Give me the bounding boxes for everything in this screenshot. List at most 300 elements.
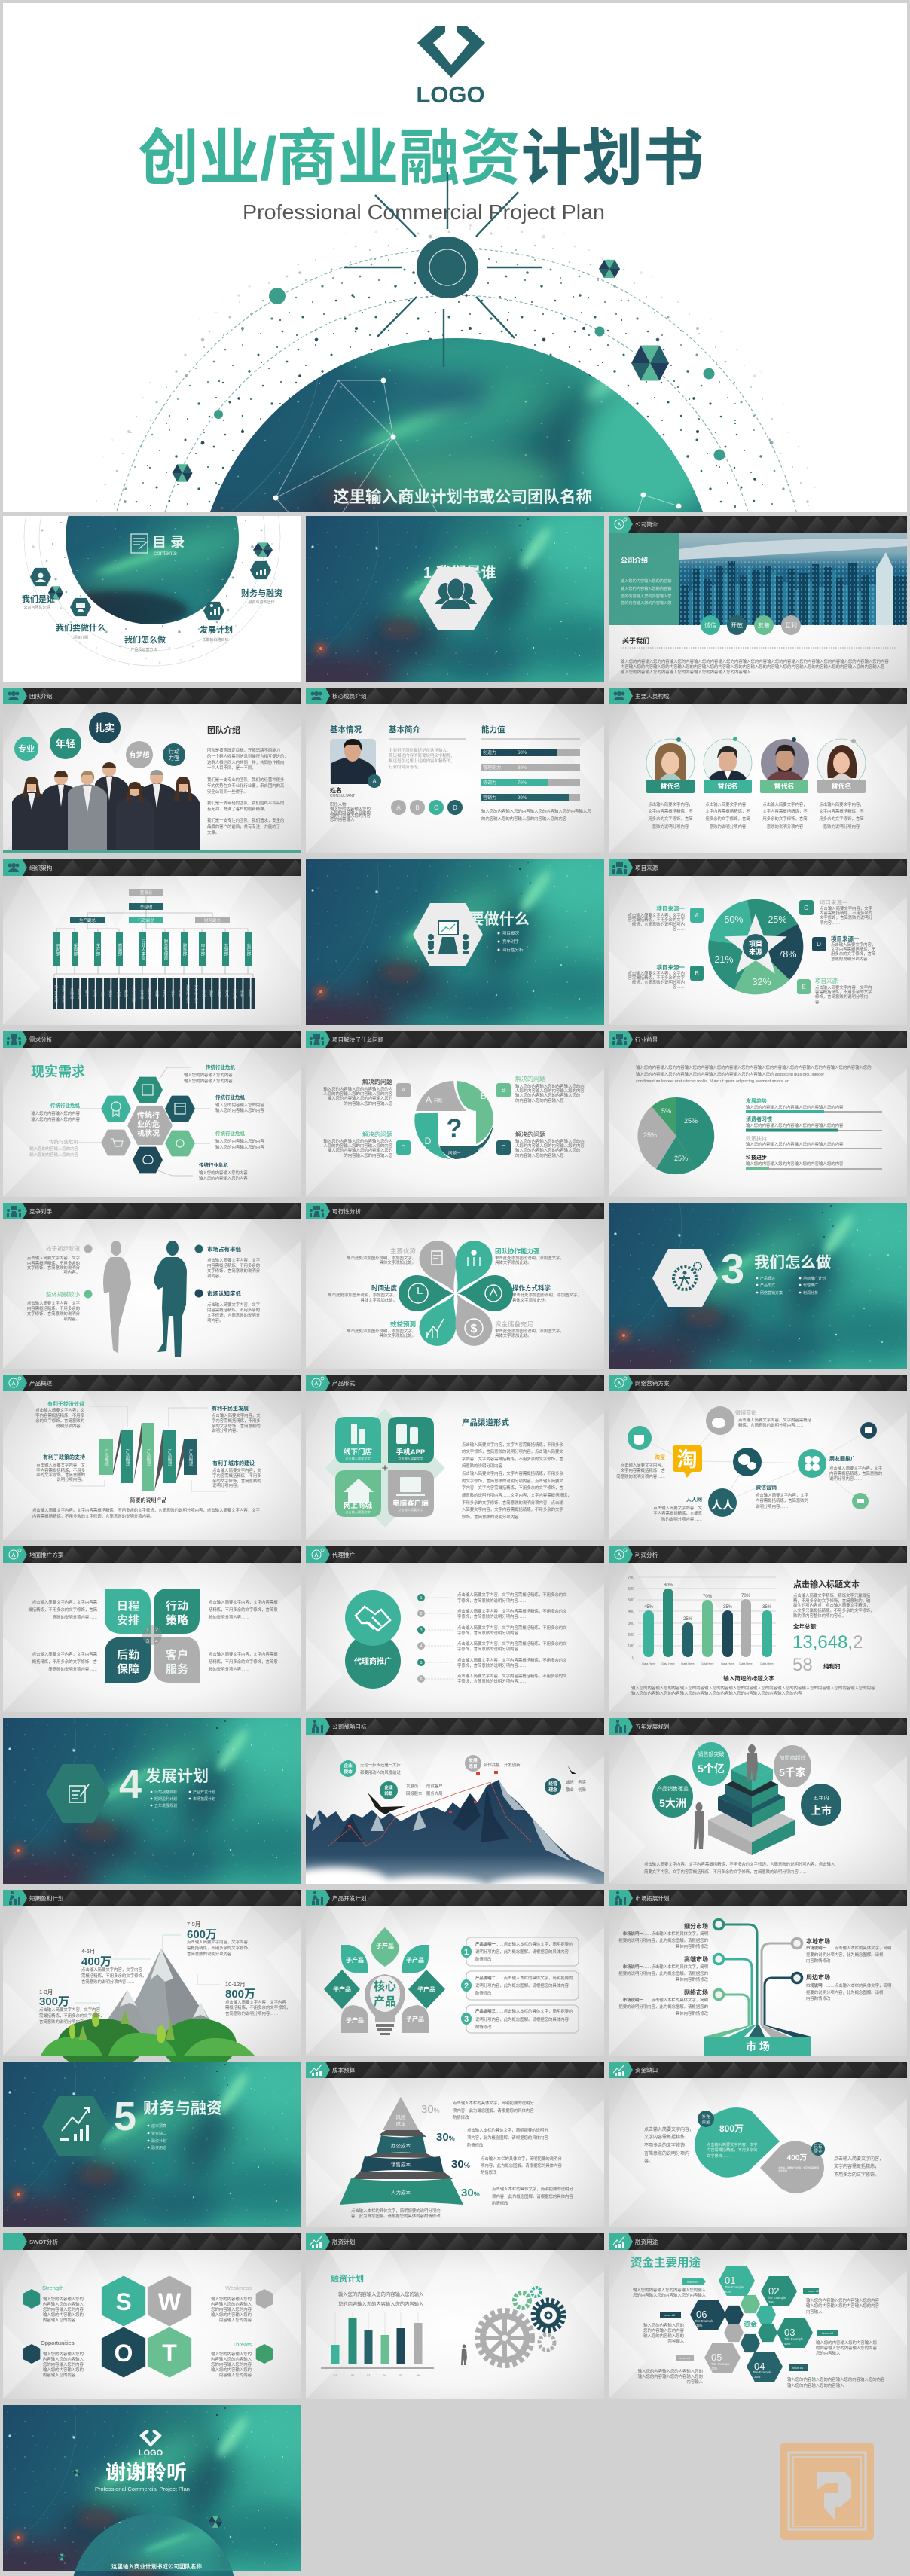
need notes right: 输入您的内容输入您的内容 — [199, 1175, 248, 1181]
orbit rings — [116, 249, 797, 512]
issue tags: Issue #1 — [687, 2280, 699, 2284]
channel text: 的文字修饰，言简意赅的说明分项内容，点击输入简要文 — [462, 1448, 563, 1454]
four quadrant tiles: 安排 — [117, 1613, 139, 1627]
cost pyramid — [340, 2097, 463, 2205]
gap notes: 不用多余的文字修饰， — [644, 2142, 689, 2148]
skill bars: 80% — [518, 766, 527, 771]
woman silhouette — [103, 1241, 131, 1354]
problem notes left: 输入您的内容输入您的内容输入您的内 — [323, 1138, 392, 1144]
issue tags: Issue #4 — [792, 2366, 804, 2370]
speech bubbles: 上市 — [811, 1805, 832, 1817]
fund notes: 内容输入 — [806, 2309, 823, 2315]
issue tags: Issue #3 — [822, 2331, 834, 2335]
hex icon marks — [35, 569, 266, 615]
market notes left: 市场说明一……点击输入本栏的具体文字，简明 — [623, 1930, 708, 1937]
subtitle: Professional Commercial Project Plan — [243, 200, 605, 224]
header icon — [8, 691, 19, 700]
department labels: 售后部 — [246, 943, 251, 957]
agent list: 4 — [420, 1644, 423, 1649]
agent list: 点击输入简要文字内容，文字内容需概括精炼，不用多余的文 — [457, 1592, 567, 1598]
member name: 您的内容输入您的内容 — [330, 813, 371, 819]
speech bubbles: 5个亿 — [698, 1763, 725, 1775]
letter tags: C — [502, 1144, 506, 1151]
section title: 发展计划 — [145, 1768, 209, 1785]
plan text — [338, 2291, 424, 2307]
bar chart: 35% — [762, 1605, 772, 1610]
marketing notes: 微信营销 — [756, 1484, 777, 1491]
channel text: 修饰，言简意赅的说明分项内容…… — [462, 1514, 527, 1520]
header title: 资金缺口 — [635, 2066, 658, 2074]
SWOT notes left: 内容输入您的内容输入 — [43, 2356, 84, 2362]
staff text: 用多余的文字修饰，言简 — [762, 816, 808, 822]
department labels: 采购部 — [72, 943, 78, 957]
summary text — [32, 1497, 260, 1519]
hexagon badge — [413, 903, 483, 966]
marketing notes: 文字内容需概括精炼，言 — [621, 1467, 666, 1473]
market notes left: 细分市场 — [684, 1922, 708, 1930]
problem notes right: 输入您的内容输入您的内容输入您的 — [515, 1147, 580, 1153]
source notes right: 项目来源一 — [815, 978, 844, 984]
bar chart: Data Here — [721, 1662, 734, 1665]
cost notes: 项内容，此为概念图解。请根据您的具体内容 — [492, 2193, 573, 2199]
intro text: 主要担任岗位描述是在这里输入。 — [389, 747, 451, 753]
gap notes: 容。 — [644, 2158, 653, 2164]
core label — [374, 1979, 396, 2008]
need notes right: 输入您的内容输入您的内容 — [215, 1102, 264, 1108]
gap teardrops: 文字修饰 — [778, 2169, 787, 2172]
left notes: 处于初步阶段 — [46, 1244, 80, 1252]
agent list: 字修饰，言简意赅的说明分项内容…… — [457, 1646, 527, 1652]
market notes right: 内容酌情修改 — [806, 1995, 831, 2001]
feasibility notes left: 主要优势 — [390, 1247, 416, 1255]
milestones: 10-12月 — [225, 1981, 246, 1988]
team text: 我们是一支年轻的团队，我们始终平和高的 — [207, 800, 284, 806]
four quadrant tiles: 后勤 — [117, 1648, 139, 1662]
cost pyramid: 办公成本 — [391, 2142, 411, 2149]
bar chart: 400 — [628, 1610, 634, 1614]
SWOT headings: Weakness — [225, 2285, 252, 2291]
card numbers — [461, 1946, 472, 2025]
source notes right: 项内容…… — [820, 920, 840, 926]
bullet list: 利润分析 — [803, 1290, 818, 1296]
skill bars: 协调力 — [483, 780, 496, 786]
goal notes: 都要用动人的风度前进 — [360, 1769, 402, 1775]
planet — [66, 516, 239, 624]
card text: 说明分项内容，此为概念图解。请根据您的具体内容 — [475, 1949, 570, 1955]
portrait 3 — [761, 737, 809, 780]
benefit notes left: 点击输入简要文字内容，文 — [35, 1407, 85, 1413]
benefit notes left: 点击输入简要文字内容，文 — [36, 1462, 86, 1468]
letter tags: D — [402, 1144, 406, 1151]
agent list: 点击输入简要文字内容，文字内容需概括精炼，不用多余的文 — [457, 1608, 567, 1614]
small side hexagons — [23, 2289, 273, 2364]
ribbon bars: 产品概述 — [167, 1448, 172, 1467]
header icon — [9, 1377, 21, 1387]
ribbon bars: 产品概述 — [125, 1448, 130, 1467]
card text: 说明分项内容，此为概念图解。请根据您的具体内容 — [475, 2016, 570, 2022]
card text: 酌情修改 — [475, 2024, 492, 2030]
feasibility notes right — [495, 1247, 582, 1338]
header icon — [615, 518, 627, 529]
panel: problems solved — [306, 1031, 604, 1197]
right notes: 内容需概括精炼，不用多余的 — [207, 1262, 260, 1268]
card text: 酌情修改 — [475, 1990, 492, 1996]
accent orbs — [214, 288, 725, 461]
channel text — [462, 1442, 572, 1520]
member name: 输入您的内容输入您的 — [330, 806, 371, 812]
hex network: 04 — [754, 2361, 765, 2372]
panel: financing plan — [306, 2233, 604, 2399]
team boxes: 中心 — [163, 989, 167, 997]
small badges: 补充 — [701, 2114, 710, 2120]
gap teardrops: 内容需概括精炼，不用多余的 — [707, 2147, 757, 2153]
gap teardrops: 点击输入简要文字内容，文字内容需概括 — [778, 2165, 819, 2169]
team text: 团队是按照既定目标，开拓思路不同能力 — [207, 747, 280, 753]
hex network: 01 — [725, 2275, 735, 2286]
channel text: 不用多余的文字修饰，言简意赅的说明分项内容，点击输 — [462, 1500, 563, 1506]
logo mark — [139, 2430, 162, 2447]
right notes: 内容需概括精炼，不用多余的 — [207, 1307, 260, 1313]
card numbers: 3 — [464, 2015, 469, 2024]
milestones: 言简意赅的说明分项内容…… — [187, 1951, 240, 1957]
panel text: 您的内容输入您的内容输入您 — [621, 593, 671, 599]
hex network: 30% — [768, 2300, 775, 2304]
stepped pyramid — [708, 1759, 795, 1855]
SWOT headings: Strength — [42, 2285, 63, 2291]
intro text: 简历描述内容的简要说明文字精炼， — [389, 752, 455, 758]
star pie chart: 25% — [768, 914, 787, 925]
bar chart: Data Here — [661, 1662, 675, 1665]
contents items: 产品及运营方法 — [130, 647, 157, 652]
notes right: 括精炼，不用多余的文字修饰，言简意 — [209, 1607, 278, 1613]
bar chart: 35% — [723, 1605, 733, 1610]
marketing notes: 内容需概括精炼，言简意赅的 — [829, 1470, 882, 1476]
trend bars: 输入您的内容输入您的内容输入您的内容输入您的内容 — [746, 1141, 844, 1147]
mission bubbles: 企业 — [344, 1763, 353, 1769]
card text: 酌情修改 — [475, 1956, 492, 1962]
small badges: 资金 — [814, 2148, 823, 2154]
card text: 说明分项内容，此为概念图解。请根据您的具体内容 — [475, 1982, 570, 1988]
cost pyramid: 风险 — [396, 2114, 406, 2120]
hex network: 23% — [754, 2375, 761, 2379]
left notes: 项内容。 — [63, 1316, 80, 1322]
card numbers: 2 — [464, 1982, 469, 1991]
header icon — [614, 691, 624, 700]
fund notes: 输入您的内容输入您的内容输入 — [787, 2382, 844, 2388]
team boxes: 结构开发组 — [62, 984, 66, 1003]
six-petal flower — [399, 1235, 513, 1352]
benefit notes left: 说明分项内容。 — [56, 1476, 85, 1482]
hex network: 05 — [711, 2352, 722, 2363]
marketing notes: 点击输入简要文字内容，文 — [653, 1505, 703, 1511]
speech bubbles: 销售额突破 — [698, 1750, 725, 1757]
benefit notes right: 点击输入简要文字内容，文 — [212, 1412, 261, 1418]
right notes — [194, 1244, 261, 1323]
hex network: 40% — [711, 2367, 718, 2370]
bullet list: 产品开发计划 — [193, 1790, 215, 1795]
SWOT notes left: 您的内容输入您的内容 — [43, 2361, 84, 2367]
header icon — [311, 691, 322, 700]
main title: 创业/商业融资计划书 — [138, 125, 704, 193]
trend bars: 科技进步 — [746, 1154, 767, 1161]
bullet list: 融资计划 — [151, 2138, 166, 2144]
cost notes: 酌情修改 — [467, 2142, 484, 2148]
marketing notes: 赅的说明分项内容…… — [661, 1516, 702, 1522]
team text: 年的优势在文专业化行业覆，来自团内的高 — [207, 783, 285, 789]
hex network: Title Example — [767, 2296, 786, 2300]
team text: 一个人目不同、是一不同。 — [207, 765, 256, 771]
need notes left: 输入您的内容输入您的内容 — [29, 1146, 79, 1152]
right notes: 市场占有率低 — [207, 1245, 241, 1253]
ribbon bars: 产品概述 — [188, 1448, 193, 1467]
bullet list: 产品概述 — [760, 1276, 775, 1281]
gap notes: 点击输入简要文字内容， — [644, 2126, 694, 2132]
benefit notes right: 点击输入简要文字内容，文 — [212, 1467, 261, 1473]
skill bars: 营销力 — [483, 795, 496, 801]
SWOT notes right: 您的内容输入您的内容 — [211, 2306, 252, 2312]
SWOT notes right: 您的内容输入您的内容 — [211, 2361, 252, 2367]
member name: CONSULTANT — [330, 794, 355, 798]
name tags: 替代名 — [660, 782, 681, 790]
source notes right: 项目来源一 — [831, 935, 860, 942]
team boxes: 人力资源部 — [132, 985, 136, 1003]
channel tiles: 线下门店 — [344, 1448, 372, 1457]
fund notes: 输入您的内容输入您的内容输入您的 — [638, 2373, 703, 2379]
SWOT hexagons: O — [115, 2339, 133, 2367]
cost notes: 项内容，此为概念图解。请根据您的具体内容 — [453, 2107, 534, 2114]
panel: organization chart — [3, 859, 301, 1025]
trend bars: 输入您的内容输入您的内容输入您的内容输入您的内容 — [746, 1161, 844, 1167]
bullet list: 代理推广 — [803, 1283, 818, 1288]
marketing notes: 说明分项内容…… — [829, 1476, 862, 1482]
agent list: 字修饰，言简意赅的说明分项内容…… — [457, 1598, 527, 1604]
problem notes left: 的内容输入您的内容输入您 — [344, 1100, 393, 1106]
intro text: condimentum laoreet erat ultrices mollis. Nunc ut quam adipiscing, elementum nisi ac — [636, 1079, 789, 1084]
department labels: 研发部 — [54, 944, 60, 957]
need notes right: 输入您的内容输入您的内容 — [215, 1138, 264, 1144]
source notes right: 文字修饰，言简意赅的说明分 — [820, 914, 873, 920]
number discs: 4 — [155, 1639, 158, 1644]
benefit notes right: 有利于民生发展 — [212, 1405, 249, 1412]
notes right: 点击输入简要文字内容，文字内容需概 — [209, 1599, 278, 1605]
intro text: 行业的简历等等。 — [389, 764, 422, 770]
fund notes — [633, 2287, 885, 2388]
card text: 产品说明一……点击输入本栏的具体文字，简明扼要的 — [475, 1941, 573, 1947]
logo text: LOGO — [416, 81, 485, 108]
benefit notes left: 字内容需概括精炼，不用多 — [36, 1467, 86, 1473]
channel text: 字内容，文字内容需概括精炼，不用多余的文字修饰，言 — [462, 1485, 563, 1491]
hex network: 03 — [784, 2327, 795, 2338]
goal notes: 回报股东 服务大局 — [406, 1790, 443, 1796]
hex network: Title Example — [711, 2362, 731, 2366]
mission bubbles: 理念 — [548, 1787, 557, 1793]
panel: section 4 divider — [0, 1703, 327, 1906]
bullet list: 融资用途 — [151, 2145, 166, 2150]
trend bars: 输入您的内容输入您的内容输入您的内容输入您的内容 — [746, 1122, 844, 1128]
department labels: 营销部 — [223, 943, 228, 957]
need notes left: 传统行业危机 — [50, 1102, 80, 1109]
pie chart: 5% — [661, 1107, 671, 1115]
problem notes left: 解决的问题 — [362, 1078, 392, 1085]
percent labels — [421, 2103, 480, 2199]
source notes right: 点击输入简要文字内容， — [831, 942, 875, 948]
chart note: 精，不用多余的文字修饰，言简意赅的，输 — [793, 1598, 871, 1604]
SWOT notes right: 输入您的内容输入您的 — [211, 2296, 252, 2302]
cost notes — [351, 2100, 573, 2219]
milestones: 400万 — [81, 1955, 111, 1968]
city photo — [679, 533, 907, 625]
agent list: 2 — [420, 1612, 423, 1616]
hexagon badge — [652, 1249, 718, 1307]
header title: 市场拓展计划 — [635, 1894, 670, 1902]
percent labels: 30% — [421, 2103, 440, 2116]
fund notes: 输入您的内容输入您的内容输入您的输入 — [633, 2287, 707, 2293]
net profit label: 纯利润 — [823, 1662, 841, 1670]
agent list: 5 — [420, 1661, 423, 1665]
source notes right — [815, 899, 876, 1005]
orbit rings — [24, 516, 280, 666]
slide heading: 现实需求 — [31, 1064, 85, 1079]
team boxes: 总装 — [101, 989, 105, 998]
source notes left: 修饰，言简意赅的说明分项内 — [632, 921, 685, 927]
watermark stamp — [780, 2443, 874, 2540]
benefit notes right: 字内容需概括精炼，不用多 — [212, 1418, 261, 1424]
fund notes: 输入您的内容输入您的内容输入您的内容 — [806, 2297, 880, 2303]
four quadrant tiles: 策略 — [166, 1613, 188, 1627]
team text — [207, 747, 289, 835]
panel: short-term profit plan — [3, 1890, 301, 2070]
bar chart: 70% — [703, 1595, 713, 1599]
bar chart — [628, 1576, 776, 1665]
pie chart: 25% — [674, 1155, 688, 1162]
staff text: 意赅的说明分项内容 — [710, 823, 747, 829]
four quadrant tiles: 客户 — [166, 1648, 188, 1662]
planet highlight — [341, 338, 702, 512]
left notes: 点击输入简要文字内容，文字 — [27, 1300, 80, 1306]
milestones: 7-9月 — [187, 1921, 200, 1927]
panel: market expansion — [609, 1890, 907, 2056]
marketing notes: 点击输入简要文字内容，文字 — [756, 1492, 808, 1498]
SWOT hexagons: T — [162, 2339, 177, 2367]
channel text: 字内容，文字内容需概括精炼，不用多余的文字修饰，言 — [462, 1456, 563, 1462]
department labels: 财务管理部 — [163, 939, 168, 961]
network lines — [640, 1421, 869, 1503]
top boxes: 总经理 — [140, 904, 153, 910]
market notes left: 具体内容酌情修改 — [676, 1943, 709, 1949]
problem notes left: 输入您的内容输入您的内容输入您的内 — [323, 1086, 392, 1092]
panel text: 您的内容输入您的内容输入您 — [621, 600, 671, 606]
panel: strategic goals — [283, 1718, 604, 1897]
problem notes left: 人您的内容输入您的内容输入您的内容 — [323, 1091, 393, 1097]
contents items: 我们是谁 — [22, 594, 55, 604]
portrait 4 — [817, 739, 866, 787]
hexagon cluster: 传统行 — [137, 1110, 160, 1120]
subtitle: Professional Commercial Project Plan — [95, 2486, 190, 2492]
problem notes left: 输入您的内容输入您的内容输入您的 — [328, 1147, 392, 1153]
four quadrant tiles: 服务 — [166, 1662, 188, 1676]
header title: 融资用途 — [635, 2238, 658, 2245]
team photo — [12, 762, 200, 853]
about text: 输入您的内容输入您的内容输入您的内容输入您的内容输入您的内容输入 — [621, 669, 751, 675]
benefit notes right: 字内容需概括精炼，不用多 — [212, 1473, 261, 1479]
ribbon folds — [113, 1423, 184, 1491]
social network nodes — [628, 1406, 877, 1517]
source notes left: 容…… — [673, 984, 685, 990]
team boxes — [53, 978, 255, 1009]
gap notes: 点击输入简要文字内容， — [834, 2156, 884, 2162]
bullet list: 五年发展规划 — [154, 1803, 177, 1808]
channel heading: 产品渠道形式 — [462, 1418, 509, 1427]
caption text: 输入您的内容输入您的内容输入您的内容输入您的内容输入您的内容输入您的内容输入您的内容输入您的内容输入您的内容输入您的内容 — [631, 1685, 875, 1691]
ABCD circles: B — [415, 804, 420, 811]
caption text: 输入您的内容输入您的内容输入您的内容输入您的内容输入您的内容输入您的内容输入您的内容 — [631, 1690, 802, 1696]
source notes right: 项目来源一 — [820, 899, 848, 906]
plus mark: + — [382, 1462, 389, 1475]
channel tiles: 点击输入简要文字 — [398, 1507, 423, 1512]
notes left — [28, 1599, 98, 1672]
fund notes: 输入您的内容输入您的内容输入您的 — [638, 2368, 703, 2374]
issue tags: Issue #6 — [664, 2313, 676, 2317]
panel: product overview — [3, 1375, 301, 1540]
star pie chart: 21% — [714, 954, 734, 965]
pinwheel diagram: C — [478, 1146, 485, 1156]
notes left: 意赅的说明分项内容…… — [53, 1614, 97, 1620]
panel: product development — [306, 1890, 604, 2056]
thank you heading: 谢谢聆听 — [105, 2462, 187, 2484]
bullet list: 可行性分析 — [502, 947, 524, 953]
gap teardrops: 800万 — [719, 2123, 744, 2134]
channel text: 简意赅的说明分项内容…… — [462, 1463, 511, 1469]
market notes left — [618, 1922, 709, 2016]
notes right: 赅的说明分项内容…… — [209, 1666, 249, 1672]
contents items: 我们怎么做 — [124, 634, 166, 645]
market notes left: 高端市场 — [684, 1955, 708, 1963]
SWOT headings: Threats — [233, 2341, 252, 2348]
panel text: 输入您的内容输入您的内容输 — [621, 585, 672, 591]
plan text: 输入您的内容输入您的内容输入您的输入 — [338, 2291, 424, 2297]
small badges — [698, 2111, 825, 2156]
left notes: 整体规模较小 — [46, 1290, 80, 1298]
market notes right: 扼要的说明分项内容，此为概念图解。请根 — [806, 1952, 884, 1958]
gap notes: 文字内容需概括精炼， — [834, 2163, 879, 2169]
bullet list: 网络营销方案 — [760, 1290, 783, 1296]
product cards — [466, 1937, 579, 2033]
connector lines — [78, 1067, 210, 1176]
staff text — [648, 801, 864, 829]
constellation nodes — [273, 378, 681, 509]
goal notes: 无论一步步还是一大步 — [360, 1762, 402, 1768]
header icon — [615, 1720, 626, 1733]
member portrait — [330, 739, 376, 784]
panel: cost budget — [306, 2062, 604, 2227]
star dots — [23, 520, 285, 666]
core label: 产品 — [374, 1995, 396, 2008]
header title: 产品形式 — [332, 1379, 356, 1387]
notes right: 点击输入简要文字内容，文字内容需概 — [209, 1651, 278, 1657]
section number: 3 — [721, 1245, 744, 1293]
caption text — [631, 1685, 875, 1696]
ribbon bars: 产品概述 — [146, 1448, 151, 1467]
hexagon cluster: 业的危 — [137, 1119, 160, 1129]
hex icon marks — [111, 1085, 185, 1164]
bar chart: 500 — [628, 1598, 634, 1603]
icon: plan note — [69, 1784, 89, 1802]
section title: 1 我们是谁 — [423, 564, 496, 581]
source notes left: 修饰，言简意赅的说明分项内 — [632, 979, 685, 985]
team text: 品牌的客户的前后，共有专注，力能的了 — [207, 823, 280, 829]
header icon — [310, 1034, 324, 1045]
cost notes: 点击输入本栏的具体文字，简明扼要的说明分项内 — [351, 2208, 441, 2214]
